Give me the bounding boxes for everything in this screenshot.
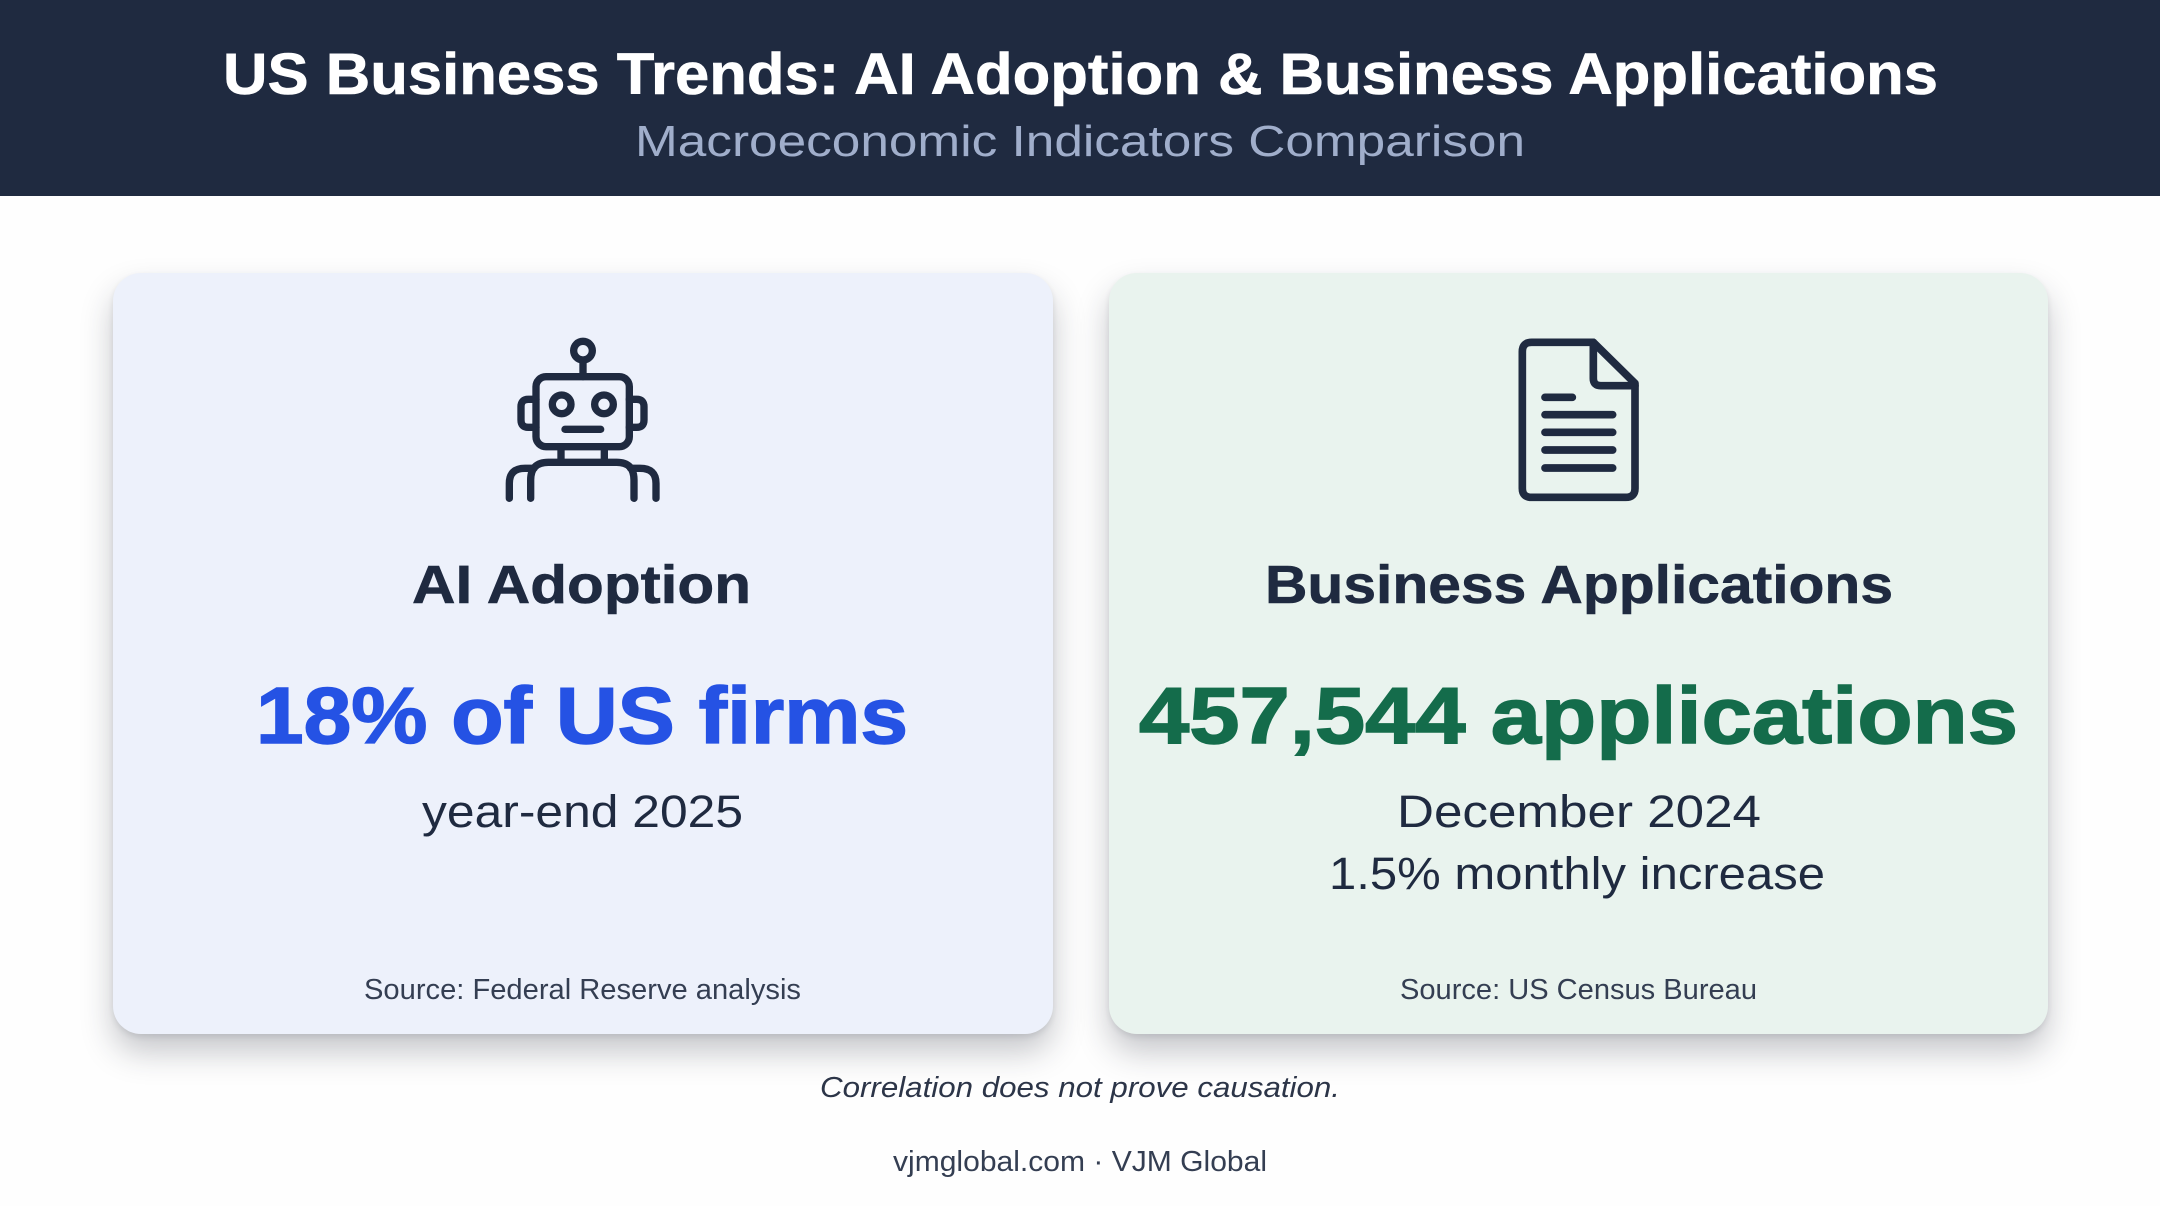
detail: December 2024: December 2024: [1397, 786, 1761, 837]
source: US Census Bureau: Source: US Census Bureau: [1400, 974, 1757, 1006]
title: US Business Trends: AI Adoption & Business Applications: [223, 42, 1938, 107]
subtitle: Macroeconomic Indicators Comparison: [635, 117, 1525, 166]
panel: business applications card: [1109, 273, 2048, 1034]
footer credit: vjmglobal.com · VJM Global: [893, 1146, 1267, 1178]
panel: AI adoption card: [113, 273, 1053, 1034]
icon: document: [1522, 342, 1635, 497]
header band: [0, 0, 2160, 196]
heading: Business Applications: Business Applications: [1265, 555, 1893, 615]
source: Federal Reserve: Source: Federal Reserve analysis: [364, 974, 801, 1006]
metric: 18% of US firms: 18% of US firms: [256, 671, 908, 760]
icon: robot: [509, 341, 656, 498]
metric: 457,544 applications: 457,544 applications: [1139, 671, 2018, 760]
detail: year-end 2025: year-end 2025: [422, 786, 743, 837]
caveat note: Correlation does not prove causation.: [820, 1072, 1340, 1104]
heading: AI Adoption: AI Adoption: [412, 555, 751, 615]
detail: monthly increase: 1.5% monthly increase: [1329, 848, 1825, 899]
